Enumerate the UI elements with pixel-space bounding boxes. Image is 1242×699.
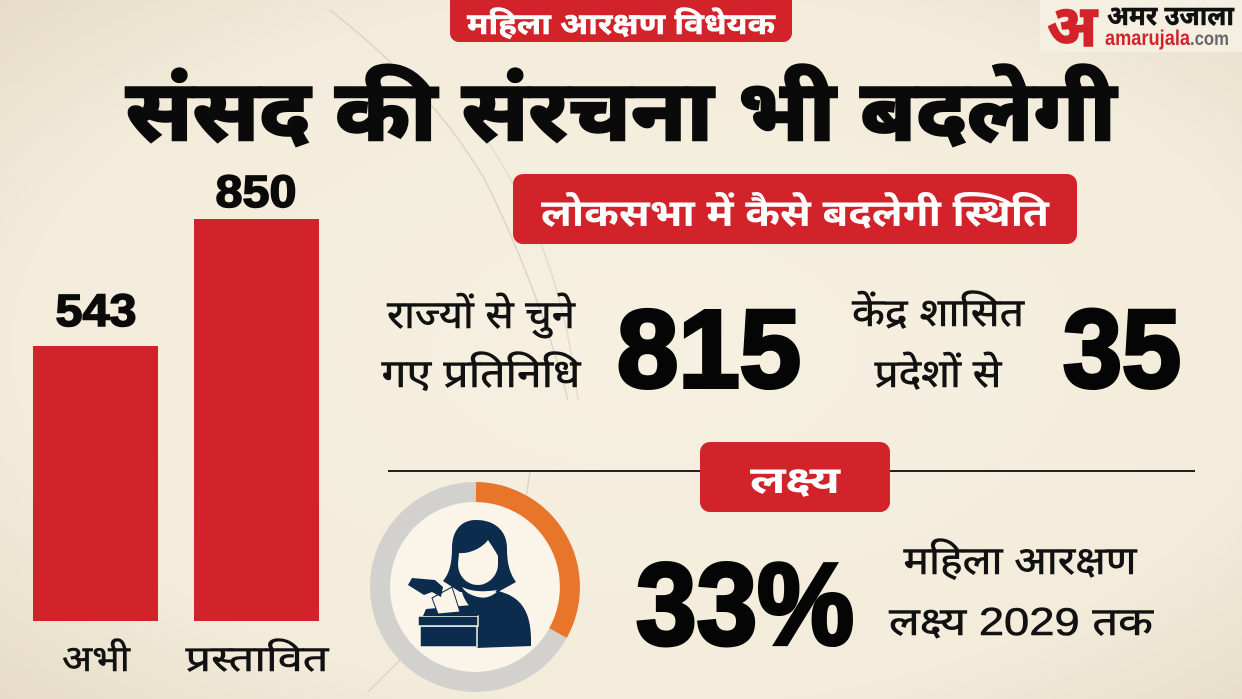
logo: Amar Ujala: .com — [1190, 29, 1229, 50]
top label: bill name — [450, 0, 792, 42]
main title: संसद की संरचना भी बदलेगी — [126, 64, 1117, 158]
icon: ballot box — [408, 578, 478, 647]
goal divider and label — [388, 442, 1195, 512]
bar: proposed 850: 850 — [216, 166, 296, 217]
stat: 33 percent women's reservation: महिला आरक्षण — [904, 539, 1137, 583]
stat: 33 percent women's reservation: 33% — [636, 539, 854, 669]
bar: proposed 850: प्रस्तावित — [186, 638, 330, 679]
bar: current 543 — [33, 285, 158, 679]
icon: woman — [443, 520, 531, 648]
stat: representatives from states — [382, 288, 801, 411]
bar: current 543: 543 — [56, 285, 136, 336]
stat: from union territories: 35 — [1063, 288, 1181, 411]
subheading: how Lok Sabha will change: लोकसभा में कैसे बदलेगी स्थिति — [541, 191, 1051, 235]
stat: from union territories: प्रदेशों से — [874, 352, 1002, 396]
stat: representatives from states: 815 — [617, 288, 801, 411]
bar: current 543: अभी — [62, 638, 131, 679]
stat: 33 percent women's reservation: लक्ष्य 2029 तक — [889, 601, 1154, 644]
bar chart: Lok Sabha seats — [33, 166, 330, 679]
stat: representatives from states: गए प्रतिनिधि — [382, 352, 582, 396]
top label: bill name: महिला आरक्षण विधेयक — [467, 6, 776, 41]
stat: from union territories — [852, 288, 1181, 411]
logo: Amar Ujala — [1040, 0, 1242, 59]
bar: proposed 850 — [186, 166, 330, 679]
stat: representatives from states: राज्यों से चुने — [387, 293, 576, 338]
icon: donut with woman voting — [380, 492, 570, 682]
subheading: how Lok Sabha will change — [513, 174, 1077, 244]
logo: Amar Ujala: amarujala — [1105, 27, 1190, 50]
goal divider and label: लक्ष्य — [750, 460, 841, 502]
stat: 33 percent women's reservation — [636, 539, 1154, 669]
stat: from union territories: केंद्र शासित — [852, 291, 1025, 335]
logo: Amar Ujala: अमर उजाला — [1107, 1, 1235, 31]
